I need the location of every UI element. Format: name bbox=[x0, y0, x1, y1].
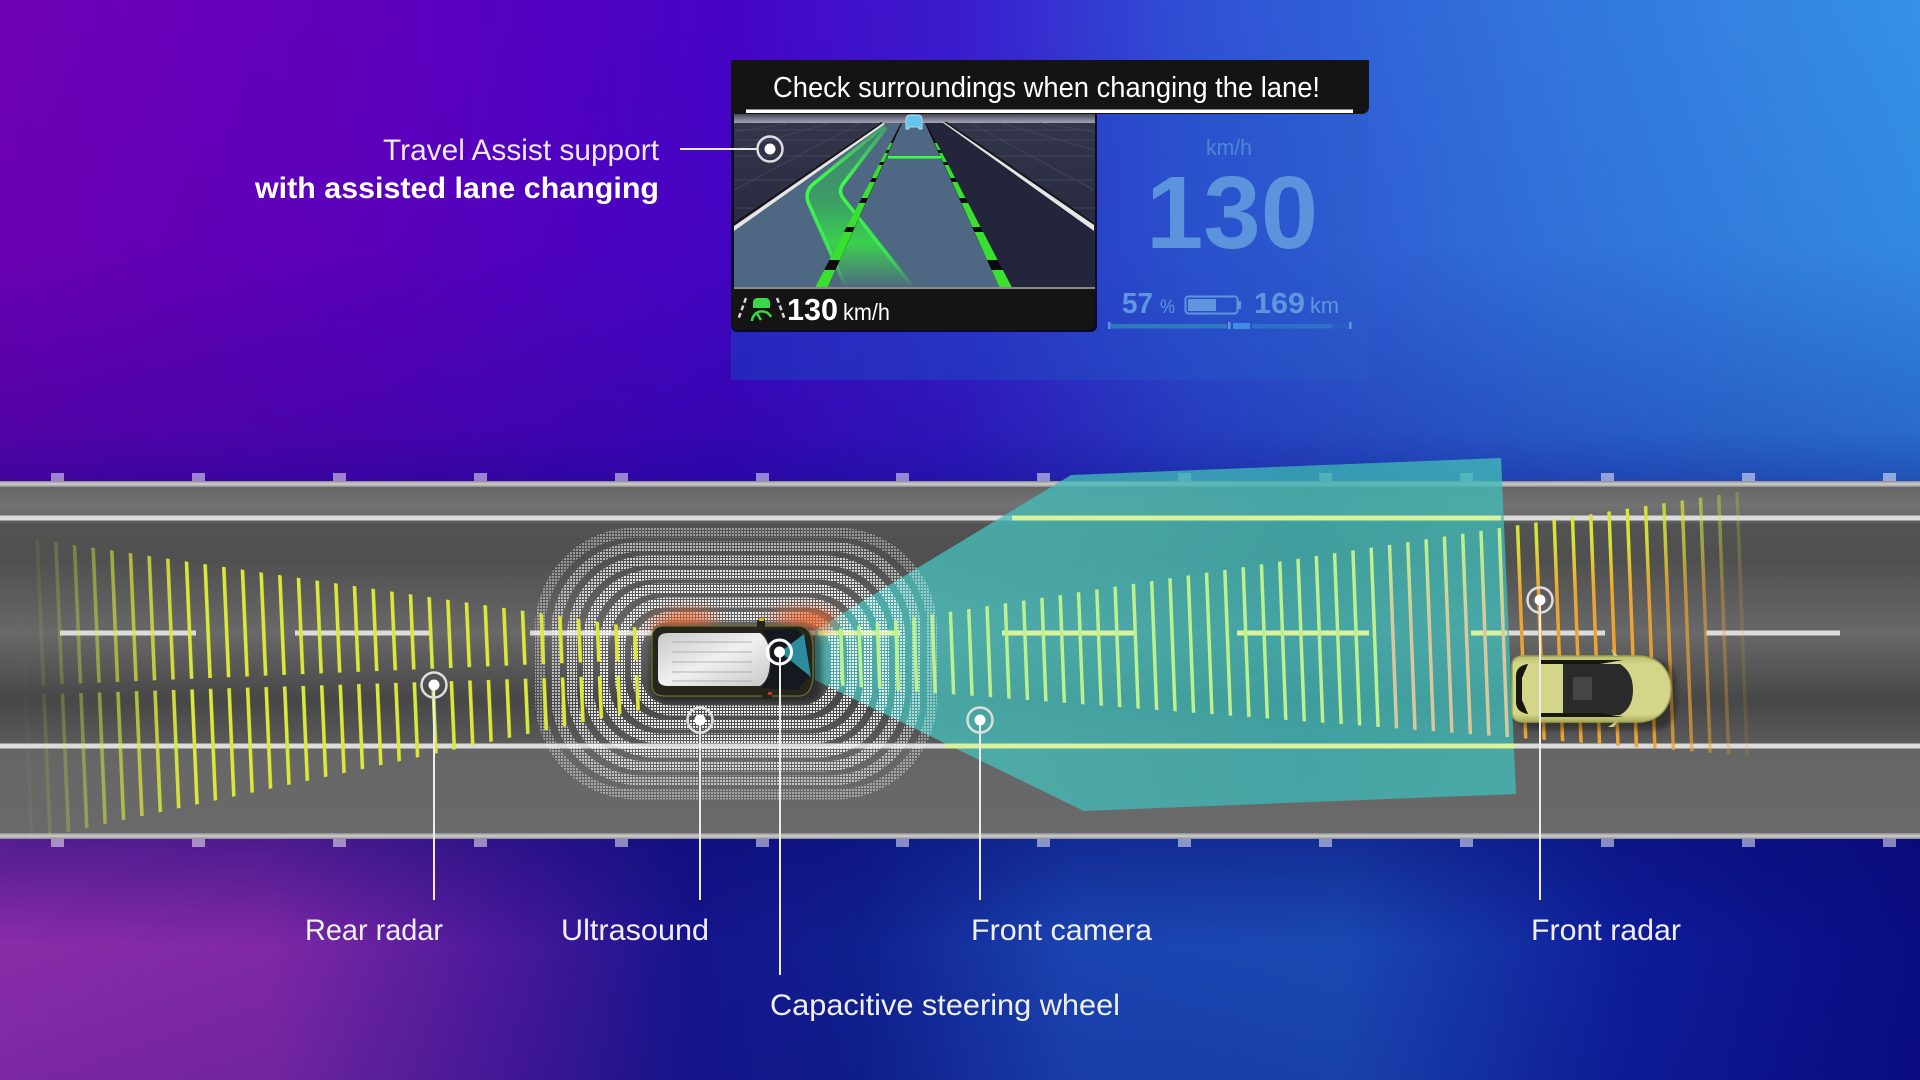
status bar bbox=[731, 287, 1095, 330]
vehicle shadow bbox=[1514, 660, 1676, 730]
navigation view with lane change bbox=[734, 113, 1095, 289]
callout text: Travel Assist support bbox=[383, 134, 660, 167]
label: Capacitive steering wheel bbox=[770, 989, 1120, 1022]
lane markings bbox=[815, 123, 1012, 288]
glass roof bbox=[1563, 664, 1633, 715]
road bbox=[0, 473, 1920, 847]
proximity warning glow bbox=[648, 610, 838, 632]
rear window bbox=[1516, 664, 1528, 714]
marker bbox=[422, 672, 446, 698]
set speed unit: km/h bbox=[843, 299, 890, 325]
marker bbox=[1528, 588, 1552, 612]
icon: assistance system bbox=[738, 298, 785, 321]
leader line bbox=[779, 657, 781, 975]
front camera field of view bbox=[815, 458, 1516, 811]
leader line bbox=[979, 725, 981, 900]
panel backdrop bbox=[731, 60, 1369, 380]
range bbox=[1254, 288, 1339, 320]
battery percentage: 57 bbox=[1122, 288, 1153, 320]
vehicle shadow bbox=[650, 628, 822, 702]
range bar bbox=[1108, 322, 1352, 329]
marker bbox=[688, 708, 712, 732]
side mirrors bbox=[1608, 649, 1618, 727]
label: Ultrasound bbox=[561, 914, 709, 947]
ego vehicle bbox=[650, 618, 822, 702]
camera cone over windshield bbox=[780, 634, 811, 677]
vehicle ahead icon bbox=[906, 115, 922, 129]
range: 169 bbox=[1254, 288, 1305, 320]
sensor: capacitive steering wheel bbox=[768, 640, 1120, 1022]
marker bbox=[758, 136, 782, 162]
sensor: front radar bbox=[1528, 588, 1681, 947]
tinted lane lines inside camera field bbox=[818, 516, 1515, 748]
side windows bbox=[1541, 660, 1623, 717]
lane lines bbox=[0, 516, 1920, 748]
rear radar bars bbox=[20, 537, 640, 842]
panel: instrument cluster display bbox=[731, 60, 1369, 380]
ultrasound field bbox=[540, 532, 932, 794]
target distance bar bbox=[888, 156, 941, 158]
road surface bbox=[0, 487, 1920, 837]
label: Front camera bbox=[971, 914, 1152, 947]
windshield bbox=[762, 629, 810, 690]
callout bold text: with assisted lane changing bbox=[254, 172, 659, 205]
callout: Travel Assist support bbox=[254, 134, 783, 205]
leader line bbox=[1539, 605, 1541, 900]
header underline bbox=[746, 110, 1353, 113]
battery percentage: % bbox=[1160, 297, 1175, 318]
icon: battery bbox=[1186, 296, 1241, 314]
sensor: front camera bbox=[968, 708, 1152, 947]
message text: Check surroundings when changing the lane! bbox=[773, 72, 1320, 104]
marker bbox=[768, 640, 792, 664]
vehicle roof bbox=[658, 633, 770, 686]
label: Front radar bbox=[1531, 914, 1681, 947]
leader line bbox=[699, 725, 701, 900]
vehicle body bbox=[652, 626, 813, 696]
speed unit: km/h bbox=[1206, 135, 1252, 160]
front radar bars bbox=[835, 491, 1752, 756]
range: km bbox=[1310, 293, 1339, 318]
sensor: ultrasound bbox=[561, 708, 712, 947]
vehicle ahead bbox=[1512, 649, 1676, 730]
car body bbox=[1512, 656, 1671, 722]
label: Rear radar bbox=[305, 914, 443, 947]
leader line bbox=[680, 148, 758, 150]
guard rail posts bbox=[51, 473, 1896, 847]
display shadow bbox=[731, 110, 1097, 332]
speed value: 130 bbox=[1146, 155, 1318, 270]
lane change path bbox=[807, 126, 914, 288]
battery percentage bbox=[1122, 288, 1175, 320]
background: upper gradient bbox=[0, 0, 1920, 490]
set speed: 130 bbox=[787, 292, 838, 327]
leader line bbox=[433, 690, 435, 900]
sensor: rear radar bbox=[305, 672, 446, 947]
marker bbox=[968, 708, 992, 732]
background: lower gradient bbox=[0, 835, 1920, 1080]
guard rails bbox=[0, 481, 1920, 839]
mirrors bbox=[757, 618, 772, 699]
message header bbox=[731, 60, 1369, 114]
